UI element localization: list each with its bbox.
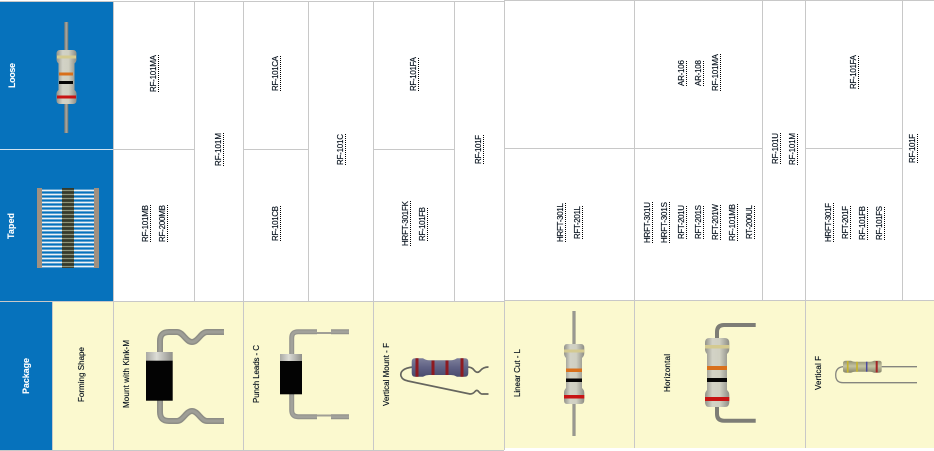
part number: RF-200MB: RF-200MB bbox=[158, 205, 167, 242]
label: Horizontal: Horizontal bbox=[663, 354, 672, 392]
part number: RF-101FB: RF-101FB bbox=[418, 207, 427, 241]
part number: RFT-201L: RFT-201L bbox=[573, 205, 582, 239]
part number: HRFT-301S: HRFT-301S bbox=[660, 202, 669, 243]
panel: right table background bbox=[505, 301, 934, 448]
label: Vertical Mount - F: Vertical Mount - F bbox=[382, 343, 391, 406]
part number: RF-101M: RF-101M bbox=[214, 133, 223, 166]
part number: RF-101FS: RF-101FS bbox=[875, 206, 884, 240]
part number: HRFT-301FK: HRFT-301FK bbox=[401, 200, 410, 246]
icon: mount with kink diode bbox=[146, 332, 224, 421]
part number: RF-101MB: RF-101MB bbox=[728, 204, 737, 241]
part number: RF-101FA: RF-101FA bbox=[849, 54, 858, 89]
part number: RF-101MB: RF-101MB bbox=[141, 205, 150, 242]
part number: RFT-201S: RFT-201S bbox=[694, 205, 703, 239]
part number: RF-101FA: RF-101FA bbox=[409, 56, 418, 91]
part number: RF-101FB: RF-101FB bbox=[858, 206, 867, 240]
row heading: Loose: Loose bbox=[7, 63, 17, 88]
label: Mount with Kink-M: Mount with Kink-M bbox=[122, 340, 131, 408]
label: Punch Leads - C: Punch Leads - C bbox=[252, 345, 261, 403]
icon: linear cut resistor bbox=[564, 311, 584, 436]
part number: RF-101MA: RF-101MA bbox=[149, 54, 158, 92]
part number: RF-101F: RF-101F bbox=[474, 135, 483, 164]
row heading: Taped: Taped bbox=[6, 213, 16, 239]
part number: RF-101MA: RF-101MA bbox=[711, 53, 720, 91]
icon: taped resistors bbox=[37, 188, 99, 268]
part number: RFT-201U: RFT-201U bbox=[677, 205, 686, 239]
part number: RF-101C: RF-101C bbox=[336, 134, 345, 165]
part number: RF-101F: RF-101F bbox=[908, 134, 917, 163]
label: Vertical F: Vertical F bbox=[814, 356, 823, 390]
panel: left table backgrounds bbox=[0, 1, 504, 450]
part number: HRFT-301L: HRFT-301L bbox=[556, 202, 565, 242]
part number: HRFT-301U: HRFT-301U bbox=[643, 202, 652, 243]
part numbers: loose and taped, right table bbox=[556, 53, 918, 243]
part number: RF-101CB: RF-101CB bbox=[271, 206, 280, 241]
label: Linear Cut - L: Linear Cut - L bbox=[513, 348, 522, 397]
part number: RT-200UL: RT-200UL bbox=[745, 204, 754, 239]
icon: vertical F resistor bbox=[836, 361, 917, 383]
part number: HRFT-301F: HRFT-301F bbox=[824, 203, 833, 242]
part number: RFT-201F: RFT-201F bbox=[841, 206, 850, 239]
icon: punch leads diode bbox=[280, 332, 349, 417]
part number: RFT-201W: RFT-201W bbox=[711, 204, 720, 240]
part number: AR-108: AR-108 bbox=[694, 59, 703, 86]
part number: RF-101U: RF-101U bbox=[771, 133, 780, 164]
part number: AR-106: AR-106 bbox=[677, 59, 686, 86]
row heading: Package: Package bbox=[21, 358, 31, 394]
part number: RF-101M: RF-101M bbox=[788, 133, 797, 165]
part numbers: loose and taped, left table bbox=[141, 54, 484, 246]
icon: vertical mount resistor bbox=[401, 358, 488, 394]
icon: loose resistor bbox=[56, 22, 76, 133]
label: Forming Shape: Forming Shape bbox=[77, 346, 86, 402]
part number: RF-101CA: RF-101CA bbox=[271, 55, 280, 91]
icon: horizontal resistor bbox=[705, 325, 756, 421]
